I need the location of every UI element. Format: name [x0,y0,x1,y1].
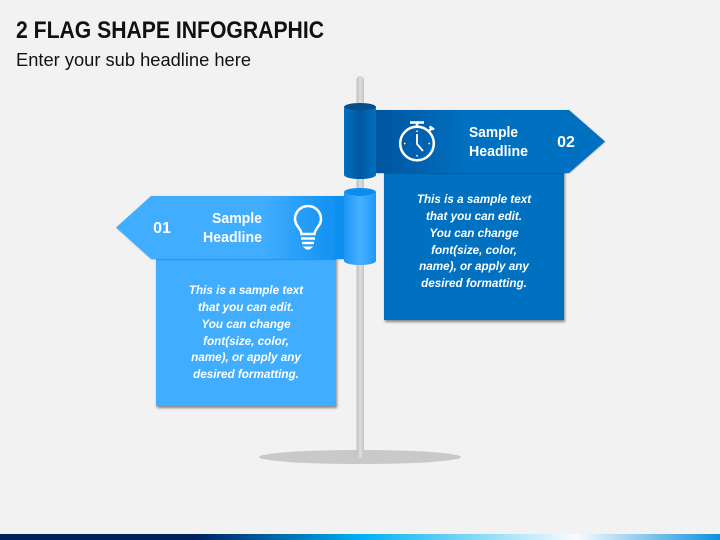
panel: 01 flag banner [116,196,344,259]
subtitle: Enter your sub headline here [16,50,251,70]
panel: 01 text card [156,256,336,406]
text: 01 body: You can change [201,318,291,331]
icon: stopwatch [400,122,434,160]
text: 01 body: font(size, color, [203,335,289,348]
title: 2 FLAG SHAPE INFOGRAPHIC [16,17,324,44]
text: 01 body [189,284,304,381]
text: 02 body: that you can edit. [426,210,522,223]
bottom gradient bar [0,534,720,540]
heading: 02: Sample [469,125,518,141]
heading: 01: Headline [203,230,262,246]
panel: 02 flag banner [376,110,605,173]
heading: 02 [469,125,528,160]
text: 02 body [417,193,532,290]
text: 02 body: desired formatting. [421,277,527,290]
heading: 01: Sample [212,211,262,227]
text: 02 body: font(size, color, [431,244,517,257]
number: 02: 02 [557,134,575,151]
ground shadow [259,450,461,464]
pole [356,76,364,458]
text: 01 body: This is a sample text [189,284,304,297]
text: 02 body: This is a sample text [417,193,532,206]
cylinder: 01 sleeve [344,188,376,265]
heading: 01 [203,211,262,246]
number: 01: 01 [153,220,171,237]
text: 01 body: name), or apply any [191,351,301,364]
icon: light bulb [295,206,321,249]
heading: 02: Headline [469,144,528,160]
cylinder: 02 sleeve [344,103,376,179]
text: 02 body: name), or apply any [419,260,529,273]
text: 02 body: You can change [429,227,519,240]
text: 01 body: desired formatting. [193,368,299,381]
text: 01 body: that you can edit. [198,301,294,314]
panel: 02 text card [384,170,564,320]
